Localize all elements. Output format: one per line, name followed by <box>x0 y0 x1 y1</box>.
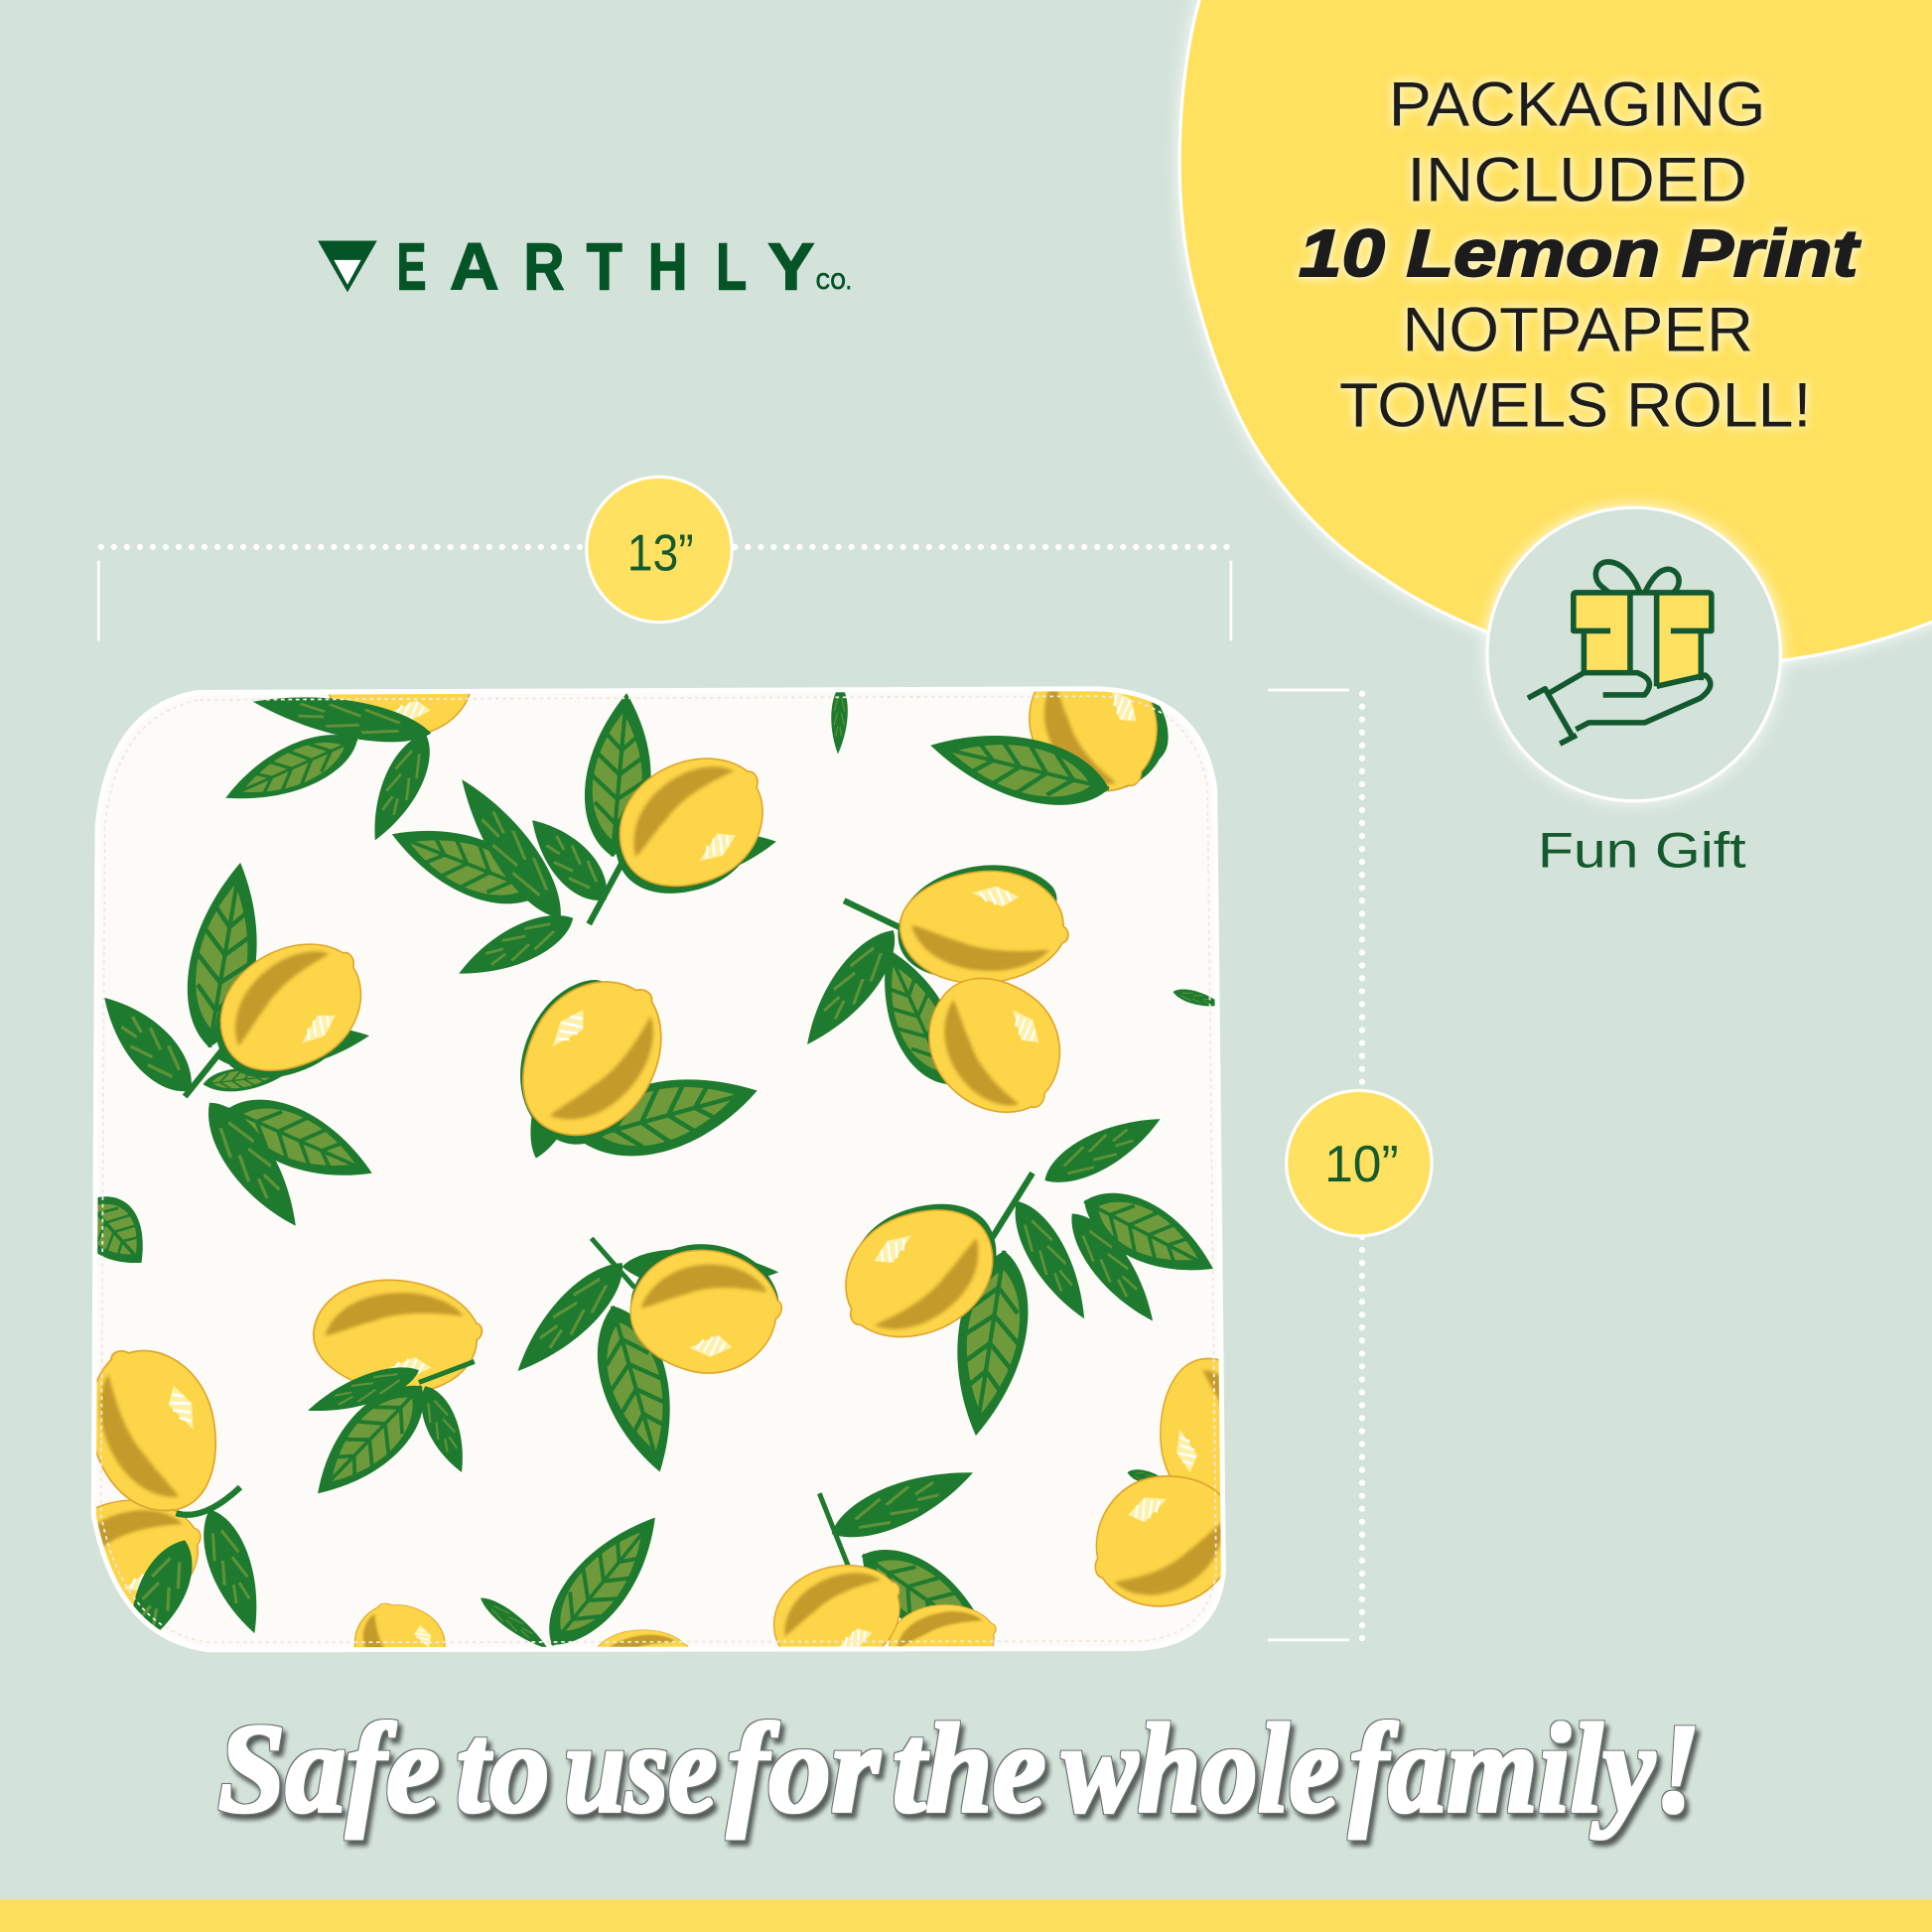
lemon cluster: bottom centre <box>353 1517 689 1648</box>
logo: Earthly Co.: T <box>587 230 622 305</box>
tagline: safe to use for the whole family: use <box>564 1697 717 1839</box>
tagline: safe to use for the whole family <box>218 1697 1701 1839</box>
dimension: width 13 inches: 13” <box>627 525 694 583</box>
logo: Earthly Co.: H <box>648 230 688 305</box>
icon: gift circle <box>1487 507 1780 801</box>
lemon cluster: bottom left corner <box>95 1196 256 1634</box>
heading: packaging included: INCLUDED <box>1407 145 1747 214</box>
logo: Earthly Co.: Y <box>767 230 814 305</box>
heading: packaging included: 10 Lemon Print <box>1299 216 1862 291</box>
lemon cluster: lower left <box>308 1279 483 1493</box>
logo: Earthly Co. <box>319 230 852 305</box>
lemon cluster: bottom right <box>772 1358 1221 1647</box>
heading: packaging included <box>1299 70 1862 440</box>
panel: yellow corner circle <box>1179 0 1932 668</box>
dimension: height 10 inches: 10” <box>1324 1136 1399 1193</box>
lemon cluster: top right <box>831 691 1169 805</box>
lemon cluster: right middle <box>845 1119 1213 1436</box>
heading: packaging included: NOTPAPER <box>1402 296 1753 365</box>
logo: Earthly Co.: E <box>397 230 426 305</box>
lemon cluster: top centre <box>391 693 776 974</box>
dimension: height 10 inches <box>1268 690 1432 1641</box>
heading: packaging included: TOWELS ROLL! <box>1339 370 1811 440</box>
tagline: safe to use for the whole family: to <box>456 1697 550 1839</box>
dimension: width 13 inches <box>98 477 1231 640</box>
lemon cluster: lower centre <box>518 1237 782 1471</box>
panel: lemon print towel <box>91 686 1226 1652</box>
heading: packaging included: PACKAGING <box>1389 70 1765 140</box>
lemon cluster: left <box>105 862 372 1226</box>
tagline: safe to use for the whole family: the <box>893 1697 1046 1839</box>
lemon cluster: top left <box>225 693 471 840</box>
logo: Earthly Co.: L <box>716 230 747 305</box>
logo: Earthly Co.: R <box>523 230 564 305</box>
lemon cluster: upper right pair <box>807 865 1215 1114</box>
logo: Earthly Co.: CO. <box>816 269 852 295</box>
bottom yellow band <box>0 1899 1932 1932</box>
tagline: safe to use for the whole family: for <box>727 1697 882 1839</box>
label: fun gift: Fun Gift <box>1538 823 1746 879</box>
tagline: safe to use for the whole family: Safe <box>218 1697 440 1839</box>
logo: Earthly Co.: A <box>450 230 499 305</box>
tagline: safe to use for the whole family: family! <box>1349 1697 1701 1839</box>
tagline: safe to use for the whole family: whole <box>1062 1697 1339 1839</box>
icon: hand holding gift <box>1528 562 1712 744</box>
lemon cluster: centre <box>520 980 758 1159</box>
